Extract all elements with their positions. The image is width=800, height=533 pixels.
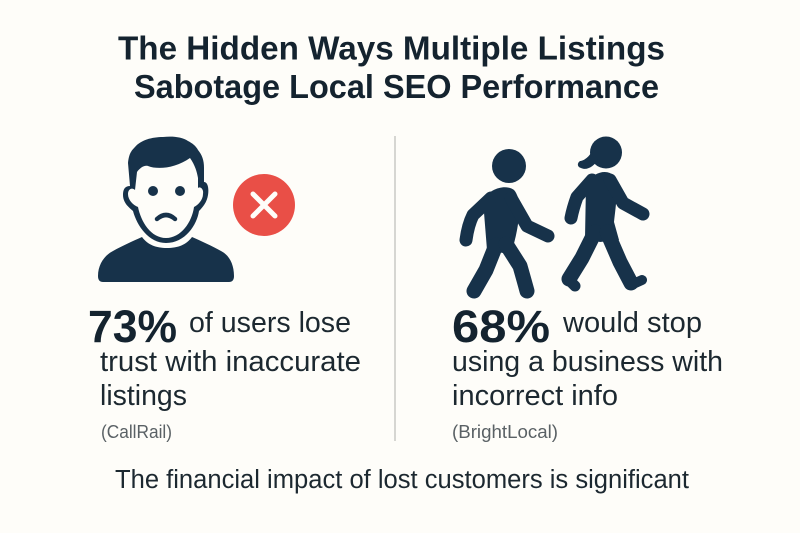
text: description: incorrect info (452, 380, 618, 412)
text: description (452, 307, 723, 412)
text: description: would stop (562, 307, 702, 339)
panel: right statistic (452, 136, 723, 442)
text: description (100, 307, 361, 412)
icon: walking man and woman (466, 136, 643, 291)
title: Sabotage Local SEO Performance (134, 69, 659, 106)
footer statement: The financial impact of lost customers is significant (115, 466, 689, 494)
text: source: (CallRail) (101, 422, 172, 442)
statistic: 68%: 68% (452, 301, 550, 352)
text: description: trust with inaccurate (100, 346, 361, 378)
statistic: 73%: 73% (88, 301, 177, 352)
text: description: listings (100, 380, 187, 412)
panel: left statistic (88, 137, 361, 442)
text: source: (BrightLocal) (452, 422, 558, 442)
title: The Hidden Ways Multiple Listings (118, 30, 665, 68)
icon: red cross badge (233, 174, 295, 236)
title (118, 30, 665, 106)
text: description: of users lose (189, 307, 351, 339)
text: description: using a business with (452, 346, 723, 378)
icon: sad man (98, 137, 234, 282)
